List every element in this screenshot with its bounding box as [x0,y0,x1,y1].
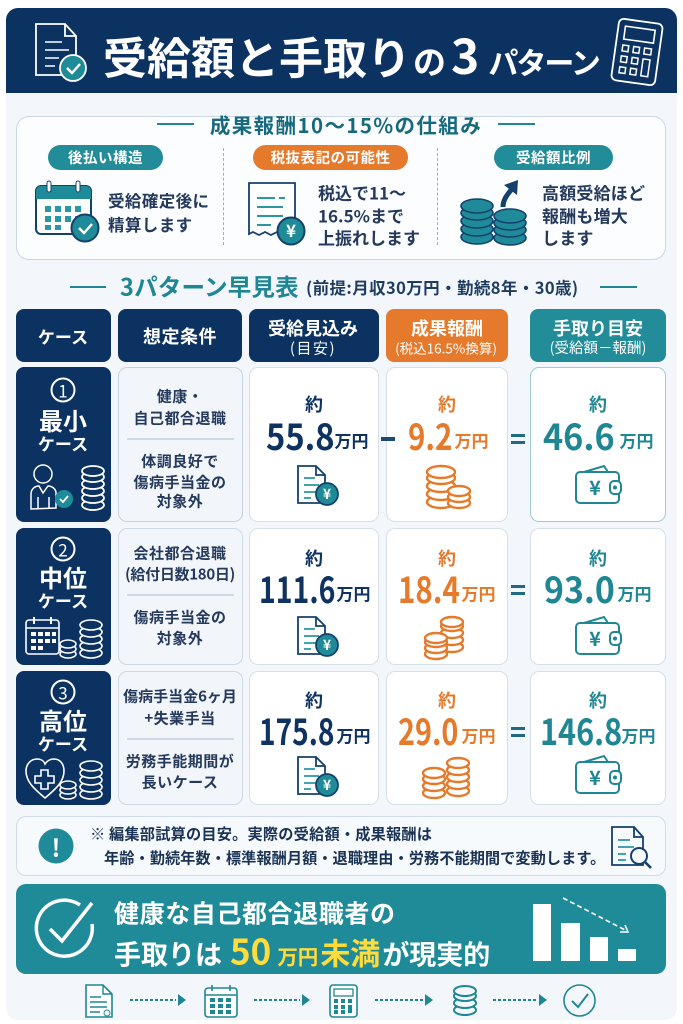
row 3 受給見込み: 175.8 [258,704,334,756]
text: 精算: 精算します [108,212,192,236]
title banner [6,8,677,93]
row 2 case: 中位ケース: ケース [38,588,88,612]
row 2 手取り目安: 万円 [618,580,652,606]
text: 高額受給ほど [542,180,645,250]
conclusion text: 健康な自己都合退職者の [114,894,396,930]
chart: descending bars [533,897,636,961]
row 2 成果報酬: 約 [438,545,456,571]
row 2 受給見込み: 約 [305,545,323,571]
icon: wallet [575,754,622,794]
arrow 2 [254,994,310,1006]
table header: 想定条件 [118,309,242,362]
icon: coins with up arrow [460,180,527,246]
icon: document with check [35,23,87,82]
row 2 手取り目安 [530,528,666,665]
row 2 成果報酬: 18.4 [398,562,459,614]
row 1 case: 最小ケース: 1 [58,378,68,402]
icon: calendar with check [35,180,100,242]
row 2 conditions: 傷病手当金の [133,606,227,628]
row 3 成果報酬: 約 [438,687,456,713]
text: 税込で上振れ: 16.5%まで [318,202,404,228]
row 3 case: 高位ケース: 3 [58,680,68,704]
row 1 手取り目安: 約 [589,391,607,417]
row 3 conditions: 長いケース [142,772,218,792]
row 2 conditions [118,528,243,665]
title text: 受給額と手取りの3 パターン [103,18,599,88]
row 2 成果報酬 [386,528,508,665]
row 3 成果報酬 [386,671,508,805]
row 3 conditions: 労務手能期間が [126,750,234,772]
equals sign row 3 [511,727,525,737]
section heading: 3パターン早見表: (前提:月収30万円・勤続8年・30歳) [306,275,579,299]
equals sign row 1 [511,434,525,444]
panel heading: 成果報酬10〜15%の仕組み [210,109,482,139]
process flow icons [85,984,596,1018]
table header: 手取り目安: 手取り目安 [553,315,643,341]
icon: document yen [297,756,339,797]
row 1 conditions: 自己都合退職 [133,408,227,428]
arrow 1 [130,994,186,1006]
icon: calculator [610,18,664,86]
pill: 後払い構造 [48,145,163,170]
icon: document yen: ¥ [323,635,332,655]
icon: heart and coins [25,758,103,800]
note box [16,816,666,876]
row 1 成果報酬: 万円 [454,428,488,452]
row 1 手取り目安: 万円 [620,428,654,452]
table header: 成果報酬: (税込16.5%換算) [395,337,497,357]
icon: document yen [297,616,339,657]
icon: document yen: ¥ [323,484,332,504]
icon: exclamation [38,828,74,864]
icon: document [85,984,113,1018]
row 3 conditions [118,671,243,805]
row 1 conditions: 傷病手当金の [133,472,227,492]
table header: 受給見込み [249,309,379,362]
row 3 成果報酬: 29.0 [398,704,458,756]
equals sign row 2 [511,585,525,595]
icon: exclamation: ! [52,828,60,864]
panel: 成果報酬の仕組み [16,116,666,260]
row 3 受給見込み: 万円 [336,722,370,748]
icon: wallet: ¥ [589,472,601,501]
text: 高額受給ほど: 高額受給ほど [542,180,645,204]
row 3 case: 高位ケース: 高位 [39,702,87,737]
icon: receipt with yen: ¥ [286,217,296,242]
row 1 受給見込み: 万円 [334,428,368,452]
arrow 4 [493,994,547,1006]
icon: document magnifier [611,826,652,869]
row 3 conditions: +失業手当 [144,708,216,728]
row 2 手取り目安: 93.0 [544,562,614,614]
row 2 成果報酬: 万円 [462,580,496,606]
icon: check circle [563,984,596,1017]
row 3 手取り目安: 万円 [622,722,656,748]
text: 精算 [108,188,209,236]
icon: coins [424,616,464,660]
row 3 conditions: 傷病手当金6ヶ月 [123,686,237,706]
row 3 case: 高位ケース: ケース [38,730,88,756]
row 3 手取り目安 [530,671,666,805]
conclusion banner [16,884,666,974]
text: 高額受給ほど: 報酬も増大 [542,202,628,228]
icon: wallet: ¥ [589,762,601,791]
table header: 成果報酬 [386,309,508,362]
row 2 case: 中位ケース: 中位 [39,559,87,594]
row 1 受給見込み: 約 [305,391,323,417]
row 3 手取り目安: 146.8 [540,704,622,756]
icon: check circle [34,898,94,958]
note box: 年齢・勤続年数・標準報酬月額・退職理由・労務不能期間で変動します。 [104,846,605,868]
table header: 手取り目安 [530,309,666,362]
pill: 税抜表記の可能性: 税抜表記の可能性 [270,147,390,168]
icon: person and coins [30,464,105,511]
row 3 手取り目安: 約 [589,687,607,713]
row 3 受給見込み: 約 [305,687,323,713]
row 1 conditions: 健康・ [157,386,203,406]
row 1 成果報酬 [386,367,508,522]
table header: 想定条件: 想定条件 [143,323,217,349]
icon: coins [426,464,472,510]
row 2 手取り目安: 約 [589,545,607,571]
icon: calendar and coins [25,617,103,659]
row 1 conditions: 体調良好で [141,450,219,472]
minus sign [381,437,395,440]
row 2 受給見込み [249,528,379,665]
heading rule right [498,123,535,125]
pill: 受給額比例: 受給額比例 [516,147,591,168]
row 2 case: 中位ケース: 2 [58,536,68,562]
icon: document yen: ¥ [323,775,332,795]
row 1 受給見込み: 55.8 [266,409,334,461]
row 2 conditions: (給付日数180日) [125,564,235,584]
icon: receipt with yen [248,182,306,246]
text: 税込で上振れ [318,180,420,250]
row 1 手取り目安 [530,367,666,522]
conclusion banner: 手取りは50 万円未満が現実的 [114,924,490,976]
table header: 受給見込み: 受給見込み [268,315,358,341]
icon: calculator [329,984,358,1018]
icon: calendar [204,985,238,1018]
heading rule left [157,123,194,125]
table header: 手取り目安: (受給額－報酬) [550,337,646,358]
icon: wallet: ¥ [589,623,601,652]
row 3 受給見込み [249,671,379,805]
icon: document yen [297,465,339,506]
row 1 conditions: 対象外 [157,490,203,512]
pill: 受給額比例 [494,145,613,170]
table header: 受給見込み: (目安) [290,338,336,358]
row 2 受給見込み: 111.6 [258,562,335,614]
row 3 case: 高位ケース [16,671,111,805]
text: 高額受給ほど: します [542,224,594,250]
row 2 受給見込み: 万円 [336,580,370,606]
icon: coin stack [453,985,477,1016]
icon: coins [422,756,470,800]
section heading: 3パターン早見表 [70,268,637,302]
text: 税込で上振れ: 上振れします [318,224,420,250]
table header: ケース: ケース [38,324,88,348]
row 1 手取り目安: 46.6 [542,409,614,461]
arrow 3 [375,994,433,1006]
row 1 成果報酬: 9.2 [408,409,452,461]
icon: wallet [575,464,622,504]
section heading: 3パターン早見表: 3パターン早見表 [120,268,299,302]
icon: wallet [575,616,622,655]
row 2 case: 中位ケース [16,528,111,665]
table header: 成果報酬: 成果報酬 [411,315,483,341]
row 1 case: 最小ケース: 最小 [39,402,87,437]
row 1 case: 最小ケース [16,367,111,522]
pill: 後払い構造: 後払い構造 [68,147,143,168]
row 2 conditions: 会社都合退職 [133,542,227,564]
text: 精算: 受給確定後に [108,188,209,212]
row 2 conditions: 対象外 [157,628,203,648]
text: 税込で上振れ: 税込で11〜 [318,180,406,204]
row 1 受給見込み [249,367,379,522]
note text: ※ 編集部試算の目安。実際の受給額・成果報酬は [90,822,432,844]
row 1 case: 最小ケース: ケース [38,430,88,456]
row 3 成果報酬: 万円 [462,722,496,748]
table header: ケース [16,309,111,362]
row 1 conditions [118,367,243,522]
pill: 税抜表記の可能性 [253,145,408,170]
row 1 成果報酬: 約 [438,391,456,417]
